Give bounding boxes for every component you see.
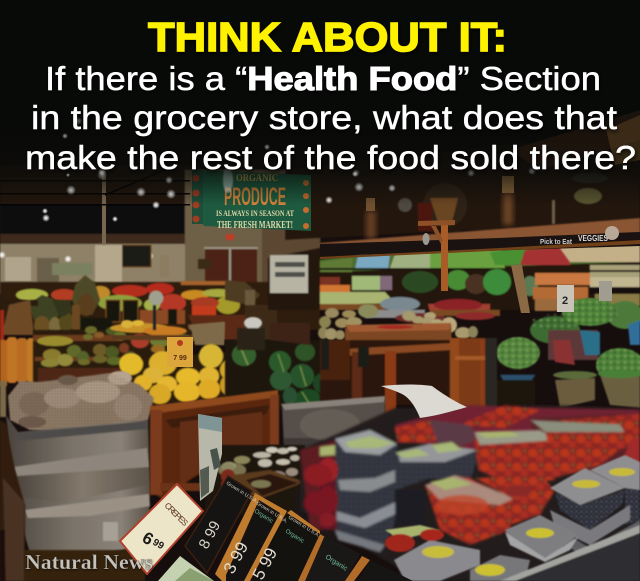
question line 3: make the rest of the food sold there? — [25, 139, 636, 176]
galvanized metal tub — [6, 415, 150, 556]
banner: organic produce — [192, 167, 311, 231]
cantaloupes — [318, 304, 478, 340]
watermelons — [225, 340, 378, 411]
photo: grocery store produce section — [0, 130, 640, 581]
title text block — [25, 14, 636, 176]
chalkboard price signs: 3 99 — [220, 539, 252, 577]
orange bottles and carrier — [0, 300, 38, 386]
mango bins — [33, 326, 193, 398]
wooden crate under melons — [150, 390, 279, 500]
chalkboard price signs: Grown in U.S.A. — [255, 501, 289, 525]
hanging track lights — [0, 167, 536, 290]
left wooden panel — [0, 381, 145, 581]
jars and folded leaflet — [205, 445, 335, 540]
central wooden display crate — [320, 323, 497, 431]
doorway and exit sign — [5, 234, 258, 290]
question line 2: in the grocery store, what does that — [31, 99, 617, 136]
wooden post — [418, 220, 455, 291]
right potted herbs — [495, 298, 640, 410]
chalkboard price signs: Grown in U.S.A. — [225, 481, 259, 505]
crepes price sign: 99 — [150, 537, 166, 552]
pineapples — [28, 275, 112, 336]
watermark: natural news: Natural News — [25, 550, 153, 574]
faint ceiling lights in the dark area — [62, 110, 640, 177]
dark gradient over photo top — [0, 0, 640, 205]
greens packet at bottom — [158, 556, 214, 581]
big strawberry clamshells — [425, 420, 625, 545]
wooden header band with chalk signs — [320, 218, 640, 291]
chalkboard price signs: Organic — [324, 554, 349, 573]
chalkboard price signs — [185, 476, 413, 581]
wooden header band with chalk signs: VEGGIES — [578, 234, 609, 243]
crepes price sign — [120, 484, 203, 574]
mesh bags of nuts — [8, 371, 154, 432]
question line 1: If there is a “ Health Food ” Section — [45, 60, 601, 97]
banner: organic produce: THE FRESH MARKET! — [217, 219, 293, 231]
clamshell berry displays — [300, 405, 640, 581]
orange citrus row — [110, 320, 225, 345]
shelf sign above the melons: 7 99 — [173, 355, 187, 362]
produce wall shelves — [268, 225, 640, 323]
price placards on the right: 2 — [562, 295, 568, 307]
chalkboard price signs: Grown in U.S.A. — [287, 515, 321, 539]
paper scale and wrap — [148, 290, 310, 350]
second metal tub — [281, 396, 385, 450]
shelf sign above the melons — [167, 337, 193, 367]
crepes price sign: CREPES — [163, 500, 190, 528]
banner: organic produce: PRODUCE — [224, 183, 286, 211]
wooden header band with chalk signs: Pick to Eat — [540, 239, 573, 246]
blueberry boxes with yellow labels — [385, 455, 640, 581]
heading: think about it: THINK ABOUT IT: — [148, 14, 507, 60]
chalkboard price signs: 8 99 — [196, 518, 224, 552]
blueberry stack — [332, 430, 400, 552]
white paper sheet — [381, 384, 467, 418]
back produce displays — [0, 280, 320, 345]
crepes price sign: 6 — [139, 528, 157, 549]
pale yellow melons — [118, 344, 283, 410]
banner: organic produce: IS ALWAYS IN SEASON AT — [216, 209, 295, 218]
chalkboard price signs: Organic — [284, 529, 305, 545]
chalkboard price signs: Organic — [253, 509, 274, 525]
leaflet card — [198, 414, 222, 501]
banner: organic produce: ORGANIC — [236, 172, 278, 184]
price placards on the right — [511, 265, 612, 313]
wagon wheel and wall decor — [398, 173, 608, 235]
back wall and ceiling — [0, 130, 640, 581]
